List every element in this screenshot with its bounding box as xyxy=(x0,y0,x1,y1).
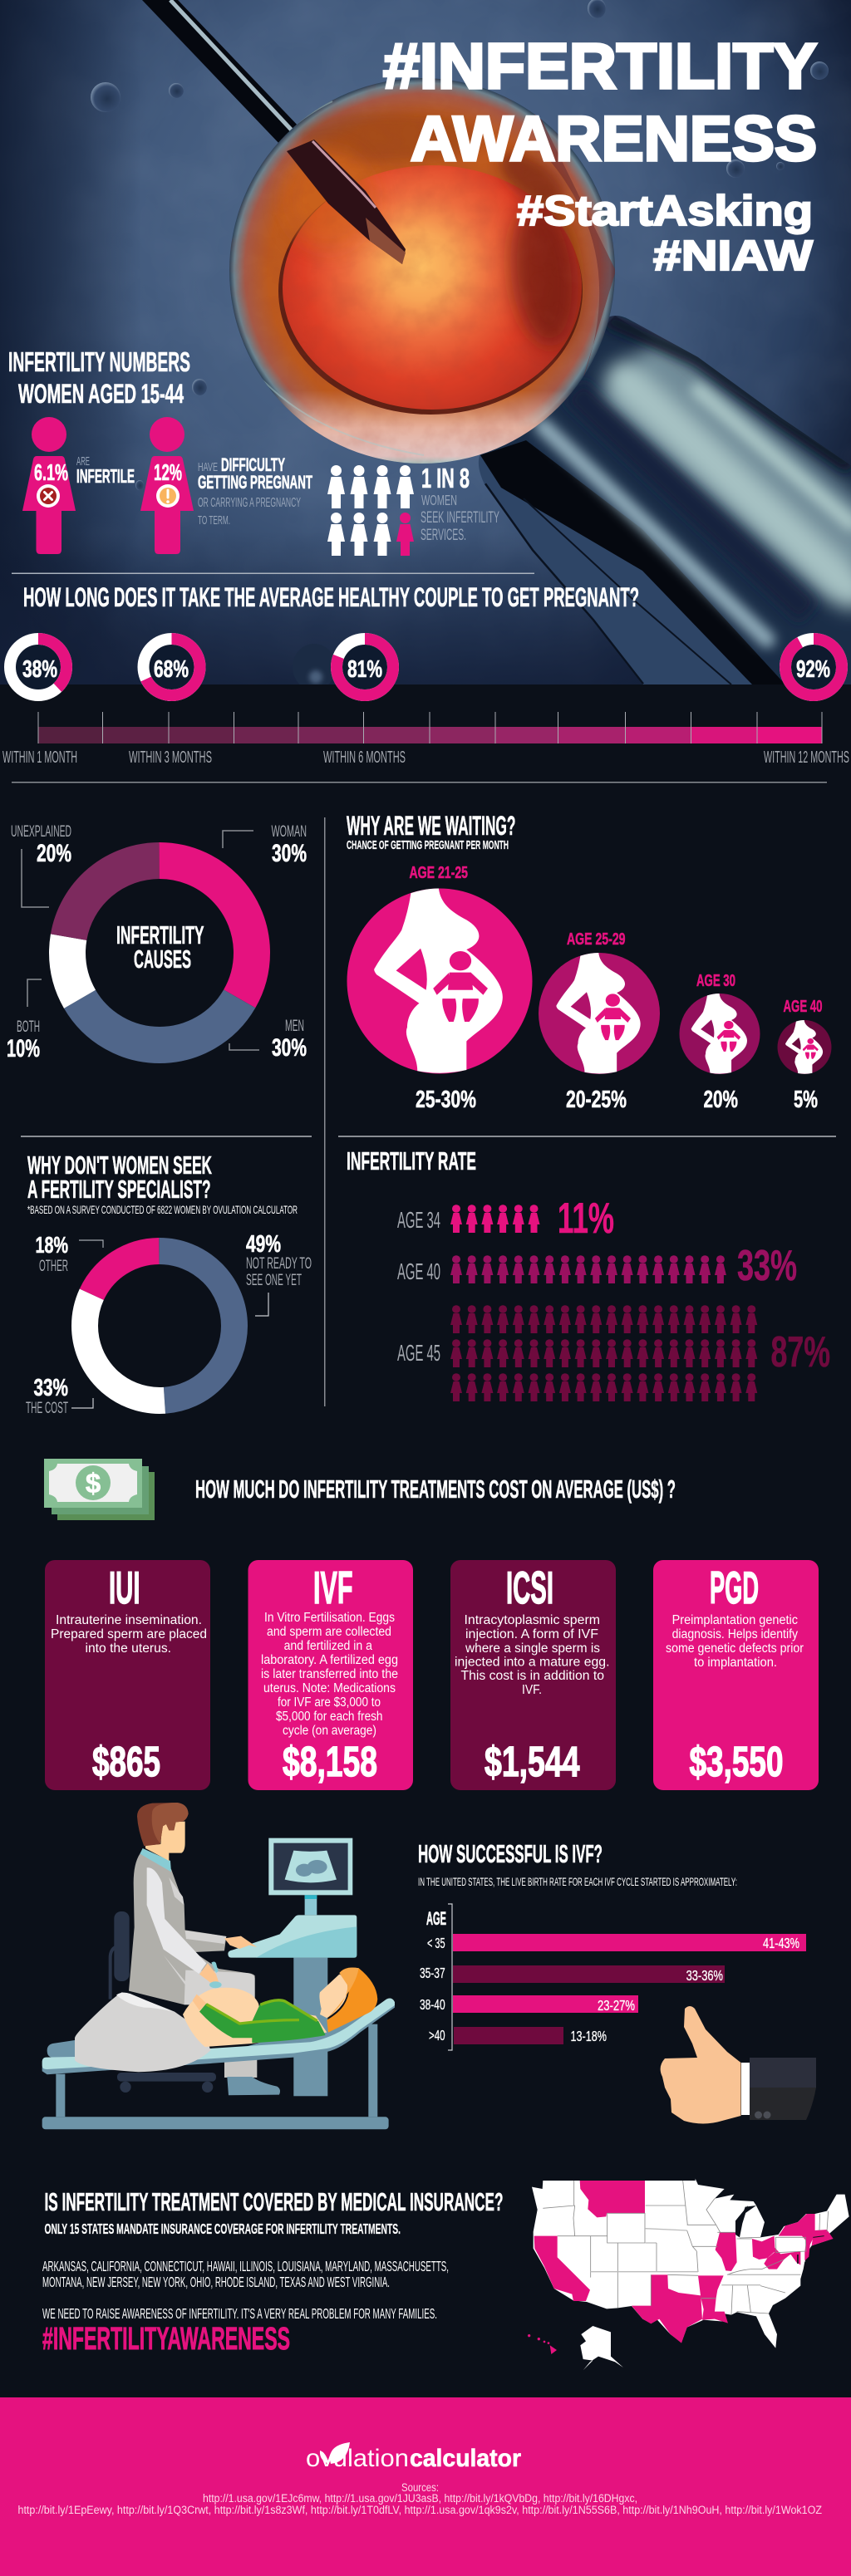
icon grid: eight women xyxy=(327,465,414,556)
card: PGD: some genetic defects prior xyxy=(666,1641,804,1656)
micro-pipette tube xyxy=(474,307,851,684)
card: IUI: IUI xyxy=(109,1562,140,1613)
title: #StartAsking xyxy=(517,187,813,234)
donut: 38% within 1 month xyxy=(4,633,72,701)
card: ICSI: $1,544 xyxy=(485,1738,580,1785)
bar chart: IVF success by age xyxy=(420,1904,806,2050)
stat: 6.1% infertile: ARE xyxy=(76,455,90,469)
bar chart: IVF success by age: 38-40 xyxy=(420,1996,445,2013)
label: unexplained 20%: UNEXPLAINED xyxy=(11,823,71,841)
card: ICSI: injected into a mature egg. xyxy=(455,1655,610,1670)
text block: list of states: WE NEED TO RAISE AWARENESS OF INFERTILITY. IT'S A VERY REAL PROBLEM FOR MANY FAMILIES. xyxy=(42,2305,437,2322)
logo: ovulationcalculator: calculator xyxy=(410,2445,521,2472)
needle xyxy=(142,0,301,145)
card: IUI: Intrauterine insemination. xyxy=(56,1613,202,1627)
heading: insurance coverage: ONLY 15 STATES MANDATE INSURANCE COVERAGE FOR INFERTILITY TREATMENTS. xyxy=(45,2220,401,2237)
label: not ready 49%: SEE ONE YET xyxy=(246,1272,302,1289)
donut: 92% within 12 months: 92% xyxy=(796,656,830,683)
pictogram: age 34: AGE 34 xyxy=(397,1207,440,1233)
heading: infertility numbers xyxy=(8,346,190,409)
label: men 30% xyxy=(229,1018,307,1062)
sheet xyxy=(75,1992,210,2072)
heading: why are we waiting xyxy=(347,811,515,852)
donut: 68% within 3 months xyxy=(138,633,206,701)
card: IUI: Prepared sperm are placed xyxy=(51,1627,207,1641)
age circle: 40 xyxy=(778,998,831,1113)
stat: 6.1% infertile: 6.1% xyxy=(34,459,68,485)
stat: 1 in 8 women: SERVICES. xyxy=(421,527,466,544)
card: IVF: and sperm are collected xyxy=(267,1625,391,1639)
age circle: 21-25 xyxy=(347,864,532,1113)
sources: Sources: xyxy=(401,2481,439,2494)
age circle: 25-29: 20-25% xyxy=(566,1087,627,1113)
stat: 12% difficulty getting pregnant: GETTING PREGNANT xyxy=(198,472,312,493)
icon: stack of money xyxy=(44,1459,155,1520)
label: unexplained 20% xyxy=(11,823,71,907)
label: woman 30%: WOMAN xyxy=(271,823,307,841)
pictogram: age 34 xyxy=(397,1195,614,1243)
card: ICSI xyxy=(450,1560,616,1790)
pictogram: age 40: 33% xyxy=(737,1242,797,1290)
card: PGD: PGD xyxy=(710,1562,759,1613)
stat: 1 in 8 women: SEEK INFERTILITY xyxy=(421,509,499,527)
card: PGD: $3,550 xyxy=(690,1738,783,1785)
icon: woman figure with warning xyxy=(140,417,194,554)
illustration: doctor performing ultrasound xyxy=(42,1803,395,2129)
age circle: 25-29 xyxy=(539,930,660,1113)
icon: cross badge xyxy=(37,484,60,508)
label: both 10%: 10% xyxy=(7,1035,40,1062)
doctor xyxy=(129,1803,280,2095)
card: IVF: and fertilized in a xyxy=(284,1639,372,1653)
card: ICSI: This cost is in addition to xyxy=(460,1669,604,1683)
stat: 6.1% infertile xyxy=(22,417,135,554)
stat: 12% difficulty getting pregnant: OR CARRYING A PREGNANCY xyxy=(198,496,301,510)
egg cell xyxy=(229,78,616,465)
card: IVF: $8,158 xyxy=(283,1738,377,1785)
heading: infertility numbers: INFERTILITY NUMBERS xyxy=(8,346,190,377)
stat: 12% difficulty getting pregnant: TO TERM. xyxy=(198,514,230,527)
map: states mandating coverage xyxy=(528,2179,849,2370)
pictogram: age 40: AGE 40 xyxy=(397,1259,440,1284)
bubbles xyxy=(91,0,829,690)
text block: list of states: ARKANSAS, CALIFORNIA, CONNECTICUT, HAWAII, ILLINOIS, LOUISIANA, MARYLAND, MASSACHUSETTS, xyxy=(42,2258,449,2274)
icon: woman figure pink xyxy=(22,417,76,554)
card: IVF: cycle (on average) xyxy=(283,1724,376,1738)
stat: 6.1% infertile: INFERTILE xyxy=(76,465,135,487)
label: men 30%: 30% xyxy=(272,1034,307,1062)
label: not ready 49%: NOT READY TO xyxy=(246,1255,312,1273)
chart: infertility causes donut: INFERTILITY xyxy=(116,921,204,949)
chart: infertility causes donut: CAUSES xyxy=(134,945,191,974)
card: PGD: to implantation. xyxy=(694,1656,777,1670)
label: other 18%: 18% xyxy=(35,1232,68,1258)
donut: 38% within 1 month: 38% xyxy=(22,656,57,683)
stat: 1 in 8 women: 1 IN 8 xyxy=(421,463,470,493)
age circle: 21-25: 25-30% xyxy=(416,1087,476,1113)
stat: 1 in 8 women: WOMEN xyxy=(421,492,457,508)
patient xyxy=(183,1968,377,2047)
card: PGD: diagnosis. Helps identify xyxy=(672,1627,798,1641)
age circle: 40: AGE 40 xyxy=(783,998,823,1016)
label: the cost 33%: 33% xyxy=(33,1375,68,1401)
console xyxy=(228,1915,357,1958)
card: IVF xyxy=(248,1560,413,1790)
label: the cost 33%: THE COST xyxy=(26,1400,68,1417)
card: IVF: is later transferred into the xyxy=(261,1667,398,1681)
icon: exclamation badge xyxy=(156,484,180,508)
sources: http://1.usa.gov/1EJc6mw, http://1.usa.gov/1JU3asB, http://bit.ly/1kQVbDg, http://bit.ly/16DHgxc, xyxy=(203,2492,637,2505)
age circle: 21-25: AGE 21-25 xyxy=(409,864,468,882)
heading: why don't women seek a specialist: A FERTILITY SPECIALIST? xyxy=(27,1175,211,1204)
heading: how successful is IVF xyxy=(418,1840,737,1888)
heading: insurance coverage: IS INFERTILITY TREATMENT COVERED BY MEDICAL INSURANCE? xyxy=(45,2187,504,2216)
text block: list of states xyxy=(42,2258,449,2322)
label: the cost 33% xyxy=(26,1375,93,1417)
bar chart: IVF success by age: >40 xyxy=(429,2027,445,2044)
card: ICSI: ICSI xyxy=(506,1562,553,1613)
bed xyxy=(42,1999,395,2074)
card: ICSI: where a single sperm is xyxy=(465,1641,600,1656)
bar chart: IVF success by age: 41-43% xyxy=(763,1935,799,1951)
pictogram: age 40 xyxy=(397,1242,797,1290)
label: both 10%: BOTH xyxy=(17,1018,40,1036)
card: ICSI: injection. A form of IVF xyxy=(465,1627,598,1641)
stool xyxy=(111,1911,216,2093)
heading: infertility numbers: WOMEN AGED 15-44 xyxy=(18,379,184,409)
stat: 12% difficulty getting pregnant: DIFFICULTY xyxy=(221,454,285,475)
card: IUI: $865 xyxy=(92,1738,160,1785)
card: IVF: for IVF are $3,000 to xyxy=(278,1695,381,1710)
text block: list of states: MONTANA, NEW JERSEY, NEW YORK, OHIO, RHODE ISLAND, TEXAS AND WEST VIRGINIA. xyxy=(42,2274,390,2290)
heading: why don't women seek a specialist: WHY DON'T WOMEN SEEK xyxy=(27,1151,212,1180)
card: PGD xyxy=(653,1560,819,1790)
pictogram: age 45: AGE 45 xyxy=(397,1340,440,1366)
heading: infertility rate: INFERTILITY RATE xyxy=(347,1147,476,1175)
card: PGD: Preimplantation genetic xyxy=(672,1613,798,1627)
donut: 81% within 6 months xyxy=(331,633,399,701)
chart: reasons donut xyxy=(85,1251,234,1401)
label: men 30%: MEN xyxy=(285,1018,304,1035)
card: IVF: laboratory. A fertilized egg xyxy=(261,1653,398,1667)
title: #INFERTILITY xyxy=(383,31,817,102)
title: AWARENESS xyxy=(411,104,817,174)
chart: infertility causes donut xyxy=(67,861,252,1045)
label: both 10% xyxy=(7,979,42,1062)
bar chart: IVF success by age: 33-36% xyxy=(686,1967,723,1984)
stat: 12% difficulty getting pregnant xyxy=(140,417,312,554)
label: not ready 49%: 49% xyxy=(246,1231,281,1258)
stat: 1 in 8 women xyxy=(327,463,499,556)
age circle: 30: 20% xyxy=(703,1087,738,1113)
monitor xyxy=(268,1838,352,1915)
card: IVF: $5,000 for each fresh xyxy=(276,1710,382,1724)
icon: thumbs up xyxy=(661,2006,816,2123)
label: not ready 49% xyxy=(246,1231,312,1316)
label: other 18% xyxy=(35,1232,103,1275)
timeline bar: WITHIN 1 MONTH xyxy=(2,748,77,767)
card: IUI xyxy=(45,1560,210,1790)
hero photo: egg and micro-pipette xyxy=(0,0,851,690)
donut: 68% within 3 months: 68% xyxy=(154,656,189,683)
sources xyxy=(18,2481,822,2516)
bar chart: IVF success by age: AGE xyxy=(426,1908,446,1929)
bar chart: IVF success by age: 23-27% xyxy=(598,1997,635,2014)
timeline bar xyxy=(2,712,849,767)
title: #NIAW xyxy=(653,232,814,279)
footer band xyxy=(0,2397,851,2576)
stat: 12% difficulty getting pregnant: 12% xyxy=(154,459,182,485)
card: IUI: into the uterus. xyxy=(85,1641,171,1656)
age circle: 30: AGE 30 xyxy=(696,972,735,990)
heading: why don't women seek a specialist xyxy=(27,1151,298,1216)
timeline bar: WITHIN 3 MONTHS xyxy=(129,748,212,767)
heading: insurance coverage xyxy=(45,2187,504,2237)
label: other 18%: OTHER xyxy=(39,1258,68,1275)
label: woman 30% xyxy=(223,823,307,867)
logo: ovulationcalculator: ovulation xyxy=(306,2445,409,2472)
icon: stack of money: $ xyxy=(86,1468,101,1499)
card: IVF: uterus. Note: Medications xyxy=(263,1681,396,1695)
age circle: 40: 5% xyxy=(794,1087,818,1113)
card: IVF: In Vitro Fertilisation. Eggs xyxy=(264,1611,395,1625)
age circle: 30 xyxy=(680,972,760,1113)
bar chart: IVF success by age: 35-37 xyxy=(420,1965,445,1981)
label: unexplained 20%: 20% xyxy=(37,840,71,867)
label: woman 30%: 30% xyxy=(272,840,307,867)
timeline bar: WITHIN 6 MONTHS xyxy=(323,748,406,767)
logo: ovulationcalculator xyxy=(306,2442,521,2472)
card: IVF: IVF xyxy=(313,1562,352,1613)
card: ICSI: IVF. xyxy=(522,1683,542,1697)
heading: why are we waiting: CHANCE OF GETTING PREGNANT PER MONTH xyxy=(347,839,509,852)
heading: why don't women seek a specialist: *BASED ON A SURVEY CONDUCTED OF 6822 WOMEN BY OVULATION CALCULATOR xyxy=(27,1203,298,1216)
hashtag: #INFERTILITYAWARENESS xyxy=(42,2322,290,2357)
heading: how successful is IVF: HOW SUCCESSFUL IS IVF? xyxy=(418,1840,603,1868)
donut: 92% within 12 months xyxy=(780,633,848,701)
age circle: 25-29: AGE 25-29 xyxy=(567,930,625,949)
bar chart: IVF success by age: < 35 xyxy=(427,1935,445,1951)
pictogram: age 45 xyxy=(397,1305,830,1401)
title xyxy=(383,31,817,279)
donut: 81% within 6 months: 81% xyxy=(347,656,382,683)
stat: 12% difficulty getting pregnant: HAVE xyxy=(198,461,218,474)
card: ICSI: Intracytoplasmic sperm xyxy=(464,1613,600,1627)
bar chart: IVF success by age: 13-18% xyxy=(570,2028,607,2044)
pictogram: age 34: 11% xyxy=(558,1195,614,1243)
heading: why are we waiting: WHY ARE WE WAITING? xyxy=(347,811,515,841)
